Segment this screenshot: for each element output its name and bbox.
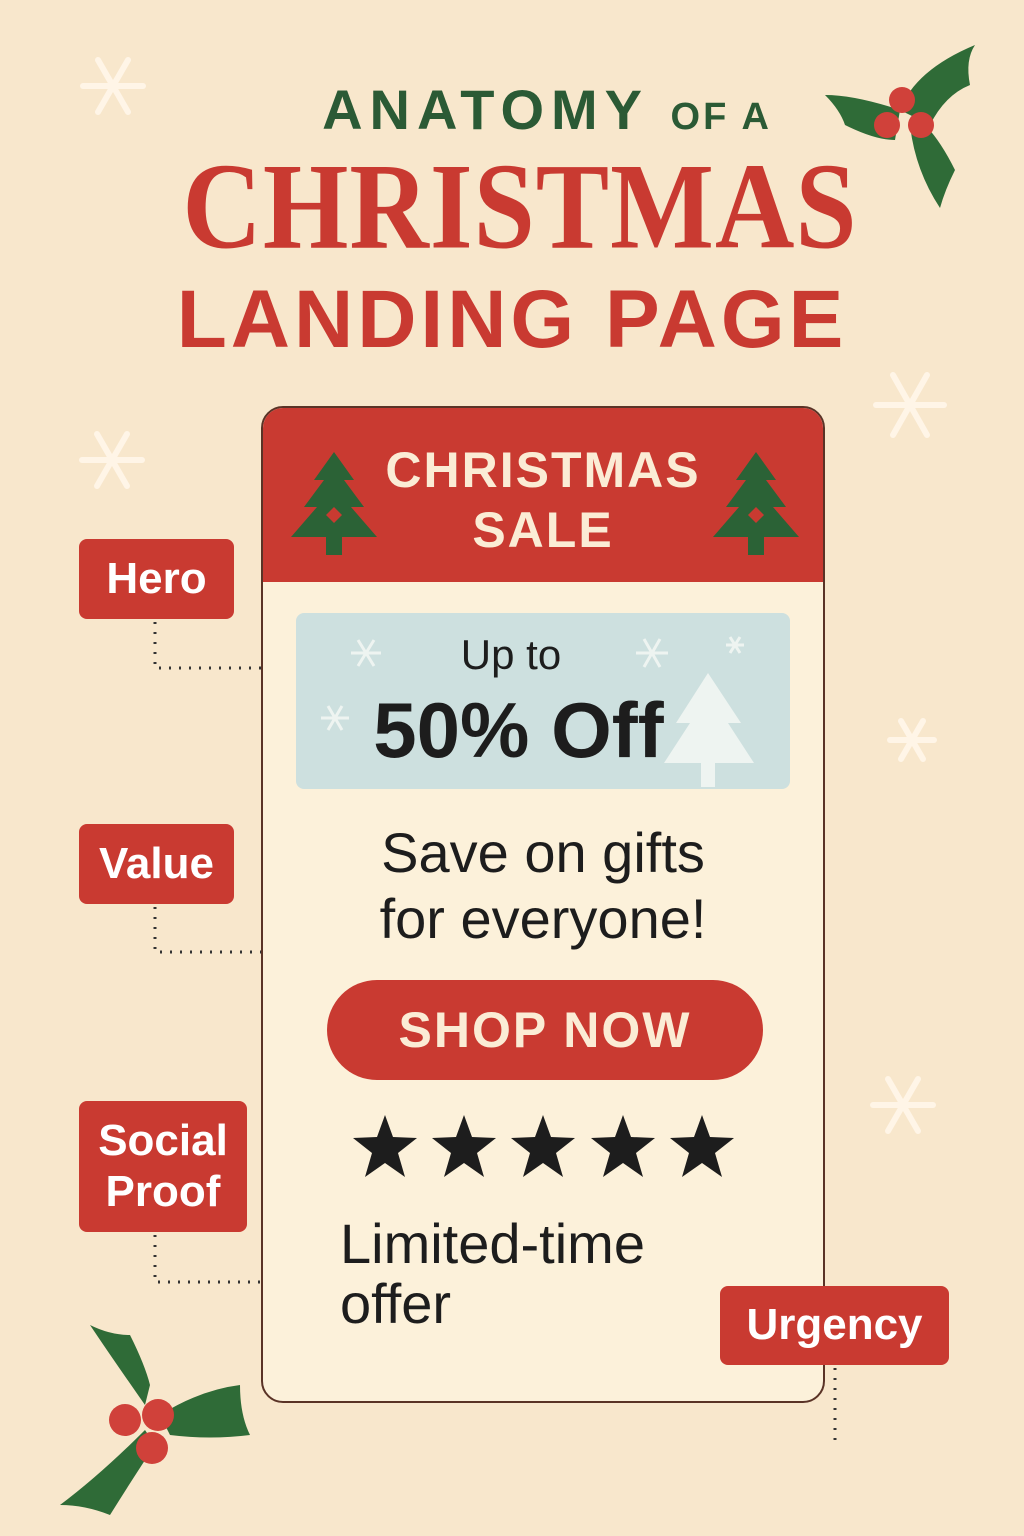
title: LANDING PAGE xyxy=(177,274,847,365)
value box: Up to xyxy=(461,631,561,678)
star rating xyxy=(353,1115,734,1177)
urgency text: offer xyxy=(340,1272,451,1335)
label: Social Proof: Social xyxy=(98,1116,228,1165)
urgency text xyxy=(340,1212,645,1335)
title xyxy=(177,78,858,365)
urgency text: Limited-time xyxy=(340,1212,645,1275)
title: ANATOMY OF A xyxy=(322,78,772,141)
icon: holly bottom left xyxy=(60,1325,250,1515)
button: shop now xyxy=(327,980,763,1080)
value box: 50% Off xyxy=(373,686,664,774)
button: shop now: SHOP NOW xyxy=(399,1002,691,1058)
label: Social Proof: Proof xyxy=(106,1166,220,1216)
panel: landing page card xyxy=(261,406,825,1403)
value box xyxy=(296,613,790,789)
title: CHRISTMAS xyxy=(182,138,858,274)
icon: tree left xyxy=(291,452,377,555)
value text xyxy=(380,821,706,950)
value text: for everyone! xyxy=(380,887,706,950)
hero header xyxy=(263,408,823,582)
icon: holly top right xyxy=(825,45,975,208)
label: Urgency xyxy=(720,1286,949,1365)
label: Value: Value xyxy=(99,839,214,888)
label: Social Proof xyxy=(79,1101,247,1232)
hero header: SALE xyxy=(472,502,614,558)
hero header: CHRISTMAS xyxy=(385,442,701,498)
label: Value xyxy=(79,824,234,904)
label: Urgency: Urgency xyxy=(746,1300,923,1349)
value text: Save on gifts xyxy=(381,821,705,884)
label: Hero: Hero xyxy=(106,554,207,603)
icon: tree right xyxy=(713,452,799,555)
label: Hero xyxy=(79,539,234,619)
